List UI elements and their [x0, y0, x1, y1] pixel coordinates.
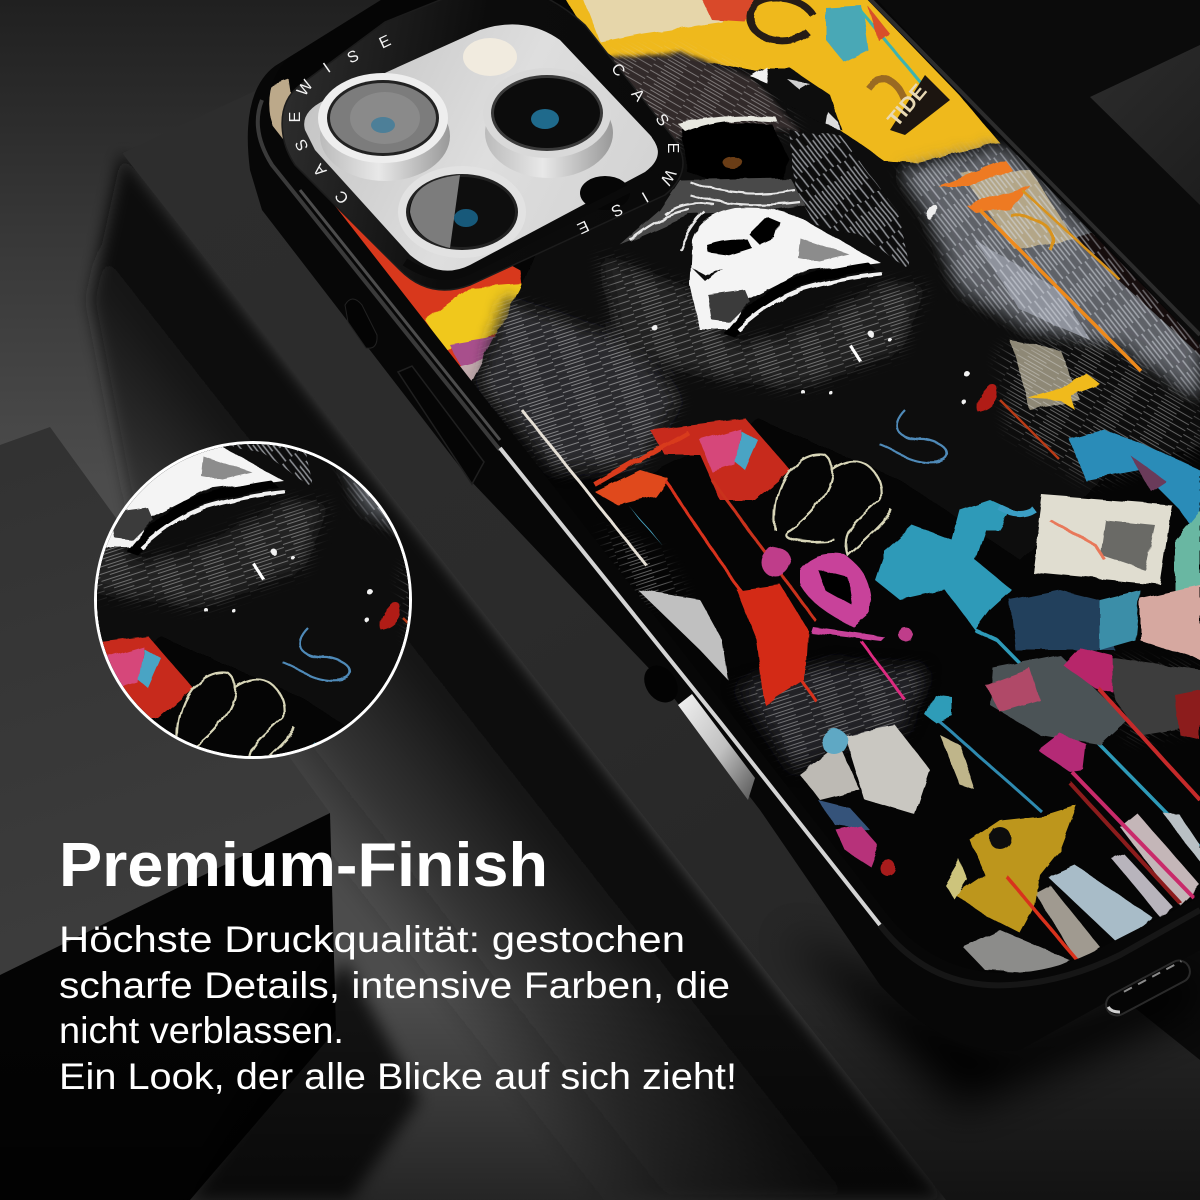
brand lettering: I: [321, 60, 334, 77]
body line 1: Höchste Druckqualität: gestochen: [59, 919, 685, 960]
phone case shell: [248, 0, 1200, 1110]
art: barcode: [940, 735, 975, 790]
flash: [463, 38, 517, 76]
rim top highlight: [866, 0, 1200, 335]
art: yellow background: [560, 0, 1000, 162]
art: light blue dab: [822, 729, 848, 755]
art: paper: [1032, 495, 1172, 584]
body line 3: nicht verblassen.: [59, 1010, 344, 1051]
art: face shadow fur: [790, 130, 910, 270]
brand lettering: S: [652, 111, 672, 130]
sensor hole: [580, 176, 630, 210]
background: bottom fade: [0, 1000, 1200, 1200]
brand lettering: C: [607, 60, 628, 80]
art: lower fur base: [737, 665, 925, 770]
body line 4: Ein Look, der alle Blicke auf sich zieht!: [59, 1056, 737, 1097]
art: red dab: [978, 385, 998, 412]
art: yellow patch lower left: [425, 284, 522, 350]
camera island: [282, 0, 683, 290]
art: muzzle shadow: [708, 290, 750, 322]
art: jaw base: [600, 255, 925, 388]
art: teal scrape: [826, 6, 868, 62]
heading: Premium-Finish: [59, 831, 548, 900]
lens: main: [318, 73, 450, 181]
art: pale shoulder patches: [960, 170, 1075, 250]
art: right blue: [1070, 430, 1200, 540]
art: black swirl: [750, 0, 812, 41]
brand lettering: I: [639, 188, 651, 205]
art: magenta left: [836, 825, 878, 866]
brand lettering: A: [310, 160, 330, 179]
brand lettering: E: [664, 143, 681, 153]
rim outer highlight: [258, 100, 500, 450]
art: dots: [652, 325, 971, 404]
rim inner highlight: [300, 190, 500, 440]
art: blue dark cloud: [1010, 590, 1115, 650]
icon: volume button: [398, 366, 484, 484]
rim lit segment: [500, 448, 880, 925]
art: white diagonal: [522, 410, 646, 565]
art: cream top: [580, 0, 745, 42]
art: pink letter: [800, 554, 871, 628]
camera glass: [304, 24, 658, 271]
art: cream corner: [269, 78, 291, 139]
icon: upper side button: [345, 299, 377, 348]
body copy: [59, 919, 737, 1097]
art: fur strokes: [97, 42, 1200, 776]
artwork lettering: sign on yellow: [883, 75, 950, 135]
brand lettering: E: [287, 112, 304, 122]
art: mottled grey: [990, 655, 1127, 745]
art: nose and muzzle white: [690, 208, 880, 330]
background: right block: [1090, 45, 1200, 205]
background: lower left step: [0, 427, 330, 975]
art: gorilla dark mass: [470, 60, 1200, 560]
art: blue graffiti: [875, 500, 1012, 630]
brand lettering: S: [345, 47, 362, 67]
art: brown swirl on yellow: [868, 79, 905, 100]
art: crown base: [610, 48, 800, 142]
art: navy patch: [818, 800, 870, 830]
art: pale strips: [1120, 813, 1200, 905]
artwork: graffiti gorilla: [255, 0, 1200, 975]
icon: action button recess: [637, 659, 685, 709]
art: lower lip highlight: [738, 274, 882, 330]
art: yellow star: [1028, 372, 1100, 410]
case soft shadow: [780, 930, 1200, 1110]
art: eye: [722, 156, 742, 168]
art: red corner strip: [334, 206, 522, 369]
art: mouth: [724, 262, 876, 338]
lens: top right: [483, 68, 613, 178]
art: nostrils: [707, 240, 752, 255]
camera ring: [282, 0, 683, 290]
body line 2: scharfe Details, intensive Farben, die: [59, 965, 730, 1006]
art: eye socket: [683, 122, 790, 180]
art: face shadow: [790, 130, 802, 140]
art: paint fleck: [850, 345, 862, 363]
icon: silver power button: [678, 694, 755, 800]
art: white fleck on shoulder: [925, 203, 939, 221]
background: step shadow: [0, 813, 336, 1200]
brand lettering: S: [292, 136, 312, 153]
brand lettering: A: [628, 86, 648, 105]
brand lettering: C: [332, 187, 353, 207]
art: red right: [1175, 690, 1200, 740]
art: magenta drip lower: [1038, 733, 1087, 772]
art: blue blob on red: [735, 430, 758, 470]
art: white paint: [845, 725, 930, 815]
inset enlarged artwork: [0, 208, 603, 1193]
art: brow: [678, 115, 778, 132]
ring inner overlap: [405, 135, 662, 276]
icon: charging port: [1102, 957, 1194, 1019]
art: ear: [750, 68, 842, 130]
lens: bottom: [398, 166, 526, 258]
brand lettering: E: [377, 32, 394, 52]
art: blue scribble: [880, 410, 948, 462]
art: red structure: [650, 418, 790, 500]
art: red lines: [665, 480, 815, 700]
brand lettering: [287, 32, 681, 237]
art: pale shoulder base: [900, 146, 1200, 400]
art: pale pink: [1140, 585, 1200, 660]
art: pink panel: [985, 668, 1040, 712]
art: squiggles: [774, 454, 892, 555]
art: shoulder base: [480, 300, 680, 470]
art: red triangle: [737, 584, 808, 705]
art: pink scraps: [450, 336, 494, 381]
rim lower curve: [880, 910, 1200, 985]
art: wrinkles: [620, 178, 805, 245]
brand lettering: W: [656, 166, 679, 188]
background: block side face: [90, 153, 946, 1200]
background: soft shadow beside step: [190, 960, 420, 1200]
brand lettering: W: [294, 76, 317, 99]
art: yellow figure: [955, 805, 1077, 933]
artwork lettering: sign on yellow: TIDE: [883, 80, 932, 131]
art: magenta drip upper: [1063, 647, 1113, 692]
brand lettering: E: [574, 217, 591, 237]
brand lettering: S: [608, 200, 625, 220]
inset magnifier circle: [0, 208, 603, 1193]
art: teal drip: [925, 695, 952, 722]
art: orange drips: [938, 160, 1012, 186]
art: newspaper scrap: [638, 590, 728, 680]
